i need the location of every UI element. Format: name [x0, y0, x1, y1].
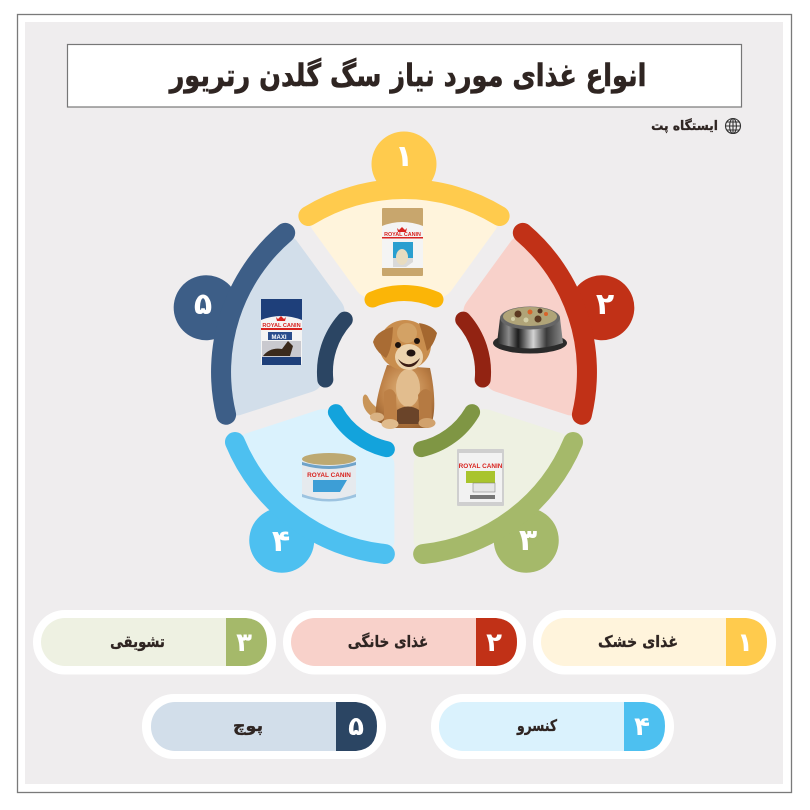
product: pouch: ROYAL CANIN [262, 323, 301, 329]
paws [382, 419, 398, 429]
product: pouch [261, 299, 302, 365]
number 1: ۱ [395, 139, 413, 174]
inner arc 2 [463, 318, 489, 380]
number tab 4 [624, 702, 665, 751]
eyes [395, 342, 401, 348]
number tab 1 [726, 618, 767, 666]
outer arc and number badge 3 [422, 442, 623, 620]
product: treat sachet [457, 449, 504, 506]
number 2: ۲ [596, 287, 614, 322]
product: can [302, 453, 356, 502]
outer arc and number badge 5 [146, 207, 285, 415]
muzzle [395, 344, 423, 370]
source credit: ایستگاه پت [651, 118, 718, 133]
product: can: ROYAL CANIN [307, 472, 351, 479]
outer arc and number badge 1 [308, 132, 500, 216]
outer arc and number badge 4 [185, 442, 386, 620]
head [379, 320, 431, 370]
segment 3: treats [372, 377, 623, 620]
legend item 1: ۱ [737, 628, 753, 658]
legend item 5: ۵ [348, 712, 364, 742]
label 2: غذای خانگی [348, 632, 428, 651]
outer arc and number badge 2 [523, 207, 662, 415]
inner arc 5 [319, 318, 345, 380]
panel: segment 5 background [206, 228, 362, 438]
number tab 3 [226, 618, 267, 666]
mouth [398, 358, 420, 367]
segment 1: dry food [308, 132, 500, 300]
panel: segment 4 background [224, 377, 436, 570]
panel: segment 2 background [446, 228, 602, 438]
number 5: ۵ [194, 287, 212, 322]
segment 4: canned food [185, 377, 436, 620]
icon: globe [726, 118, 740, 134]
segment 2: home food [446, 207, 662, 438]
number tab 2 [476, 618, 517, 666]
chest [396, 369, 420, 407]
product: dry food bag [382, 208, 423, 276]
legend item 4: ۴ [634, 712, 650, 742]
legend item 2 [283, 610, 526, 674]
label 5: پوچ [233, 716, 263, 736]
legend item 3: ۳ [236, 628, 252, 658]
panel: segment 3 background [372, 377, 584, 570]
label 4: کنسرو [516, 718, 558, 735]
nose [406, 350, 416, 356]
puppy illustration [363, 320, 437, 429]
number 4: ۴ [272, 524, 290, 559]
product: pouch: MAXI [272, 335, 287, 341]
title: انواع غذای مورد نیاز سگ گلدن رتریور [168, 58, 646, 94]
inner arc 4 [332, 412, 387, 454]
front legs [384, 389, 397, 422]
shadow between legs [397, 406, 419, 424]
legend item 1 [533, 610, 776, 674]
title box [68, 44, 742, 107]
legend item 4 [431, 694, 674, 759]
inner arc 3 [421, 412, 476, 454]
number tab 5 [336, 702, 377, 751]
ears [373, 327, 393, 358]
number 3: ۳ [519, 523, 537, 558]
product: dry food bag: ROYAL CANIN [384, 232, 421, 238]
label 3: تشویقی [110, 633, 165, 651]
segment 5: pouch [146, 207, 362, 438]
label 1: غذای خشک [598, 632, 678, 651]
tail [363, 394, 384, 419]
product: food bowl [493, 306, 567, 354]
inner arc 1 [372, 293, 436, 300]
legend item 2: ۲ [486, 628, 502, 658]
panel: segment 1 background [310, 195, 498, 297]
legend item 3 [33, 610, 276, 674]
legend item 5 [142, 694, 386, 759]
product: treat sachet: ROYAL CANIN [459, 463, 503, 470]
body [376, 365, 434, 428]
